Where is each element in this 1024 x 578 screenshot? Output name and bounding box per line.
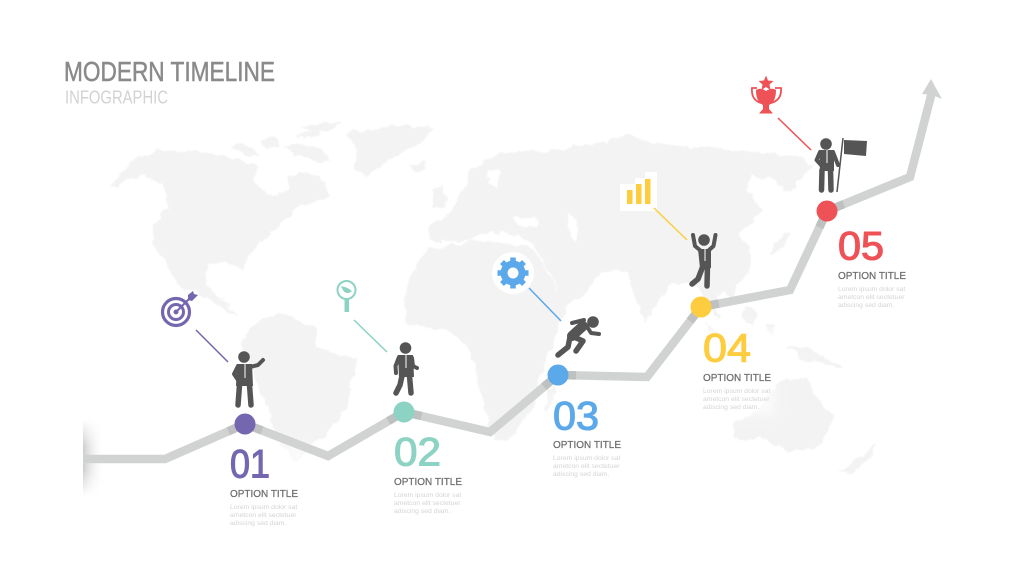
world map background: [110, 122, 877, 473]
description: Lorem ipsum dolor sat: [394, 492, 461, 499]
icon: trophy: [752, 76, 781, 114]
map: Australia: [733, 377, 833, 453]
description: ametcon elit sectetuer: [553, 463, 620, 470]
number 04: 04: [703, 326, 751, 370]
connector line: [354, 320, 387, 352]
map: North America: [110, 150, 330, 316]
step 02: [338, 281, 462, 515]
description: ametcon elit sectetuer: [703, 396, 770, 403]
heading: modern timeline: MODERN TIMELINE: [64, 56, 275, 87]
person running: [558, 316, 599, 355]
connector line: [196, 330, 228, 362]
marker: [690, 296, 712, 318]
map: New Guinea: [787, 347, 843, 367]
map: Eurasia: [428, 135, 813, 322]
step 04: [620, 172, 771, 411]
number 03: 03: [553, 394, 599, 438]
map: Madagascar: [545, 385, 556, 412]
person walking: [396, 342, 417, 393]
step 03: [492, 252, 621, 478]
description: adiscing sed diam.: [230, 520, 286, 527]
description: adiscing sed diam.: [394, 508, 450, 515]
description: ametcon elit sectetuer: [230, 512, 297, 519]
person cheering: [692, 234, 716, 286]
description: Lorem ipsum dolor sat: [230, 504, 297, 511]
title: [64, 56, 275, 108]
description: adiscing sed diam.: [703, 404, 759, 411]
number 05: 05: [838, 224, 884, 268]
map: Greenland: [347, 125, 433, 177]
map: Indonesia: [705, 305, 775, 348]
subheading: infographic: INFOGRAPHIC: [65, 88, 168, 108]
timeline path arrow: [83, 79, 942, 459]
icon: gear: [492, 252, 534, 294]
soft white haze behind text: [226, 330, 775, 530]
connector line: [778, 118, 811, 150]
description: adiscing sed diam.: [838, 302, 894, 309]
connector line: [529, 288, 561, 321]
option title: OPTION TITLE: [553, 439, 621, 451]
option title: OPTION TITLE: [838, 270, 906, 282]
person with flag: [816, 138, 867, 192]
option title: OPTION TITLE: [703, 372, 771, 384]
icon: bar chart: [620, 172, 657, 211]
option title: OPTION TITLE: [394, 476, 462, 488]
timeline start shadow: [83, 420, 105, 496]
option title: OPTION TITLE: [230, 488, 298, 500]
step 05: [752, 76, 906, 309]
map: inland seas: [487, 167, 578, 240]
description: Lorem ipsum dolor sat: [838, 286, 905, 293]
number 02: 02: [394, 430, 441, 474]
step 01: [162, 291, 298, 527]
description: Lorem ipsum dolor sat: [703, 388, 770, 395]
marker: [394, 402, 414, 422]
marker: [548, 364, 568, 386]
description: ametcon elit sectetuer: [838, 294, 905, 301]
description: Lorem ipsum dolor sat: [553, 455, 620, 462]
number 01: 01: [230, 442, 270, 486]
map: Arctic islands: [229, 122, 342, 163]
marker: [234, 414, 256, 434]
person pointing: [234, 351, 263, 405]
map: South America: [240, 313, 357, 462]
icon: magnifier: [338, 281, 356, 312]
marker: [816, 200, 838, 222]
map: Iceland: [410, 162, 427, 171]
map: Africa: [403, 240, 567, 440]
map: New Zealand: [837, 443, 877, 473]
description: adiscing sed diam.: [553, 471, 609, 478]
description: ametcon elit sectetuer: [394, 500, 461, 507]
map: UK and Japan islands: [432, 184, 792, 255]
icon: target: [162, 291, 198, 326]
connector line: [654, 208, 687, 240]
